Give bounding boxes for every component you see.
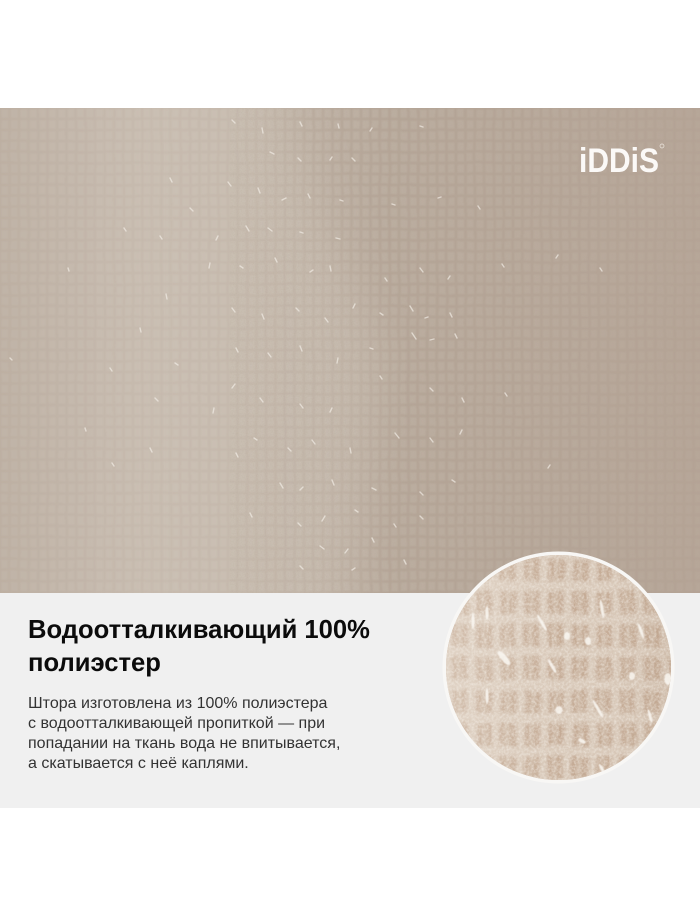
water droplets in close-up: [471, 600, 672, 775]
text block: description: с водоотталкивающей пропиткой — при: [28, 715, 325, 732]
panel: text background: [0, 593, 700, 808]
text block: description: попадании на ткань вода не впитывается,: [28, 735, 340, 752]
text block: description: [28, 695, 340, 772]
water droplets: [10, 120, 602, 570]
inset: magnified fabric circle: [446, 552, 671, 780]
heading: [28, 616, 370, 677]
text block: description: Штора изготовлена из 100% полиэстера: [28, 695, 327, 712]
heading: Водоотталкивающий 100%: [28, 616, 370, 644]
text block: description: а скатывается с неё каплями.: [28, 755, 249, 772]
photo: beige waterproof fabric with water droplets: [0, 108, 700, 593]
heading: полиэстер: [28, 649, 161, 677]
